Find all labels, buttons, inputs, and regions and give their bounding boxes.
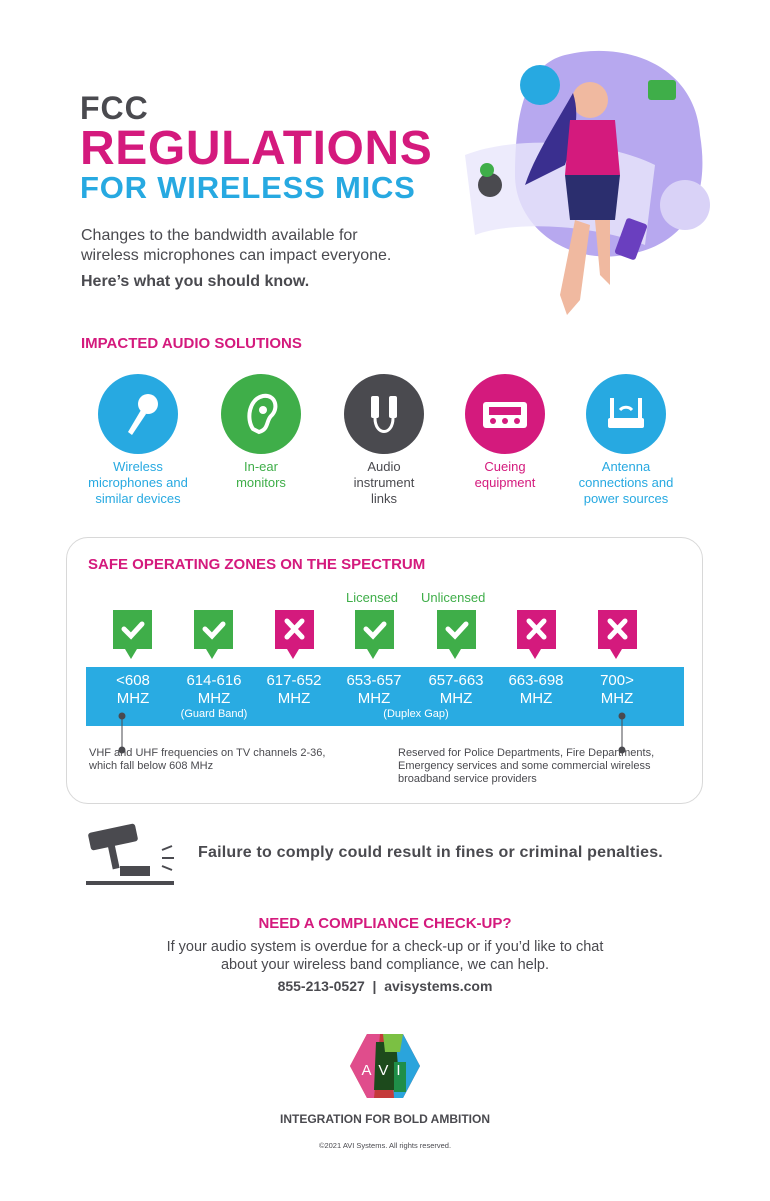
logo: AVI: AVI — [361, 1062, 409, 1079]
copyright: ©2021 AVI Systems. All rights reserved. — [319, 1141, 451, 1150]
tagline: INTEGRATION FOR BOLD AMBITION — [280, 1112, 490, 1126]
title: FOR WIRELESS MICS — [80, 170, 416, 205]
intro text: Here’s what you should know. — [81, 273, 309, 290]
intro text — [81, 227, 391, 290]
spectrum bar: MHZ — [520, 690, 552, 707]
spectrum bar: (Guard Band) — [181, 708, 247, 720]
spectrum bar: 663-698 — [508, 672, 564, 689]
labels licensed/unlicensed: Unlicensed — [421, 590, 485, 605]
icon: gavel — [86, 824, 174, 885]
panel heading: SAFE OPERATING ZONES ON THE SPECTRUM — [88, 556, 425, 573]
spectrum bar: MHZ — [601, 690, 633, 707]
spectrum bar: MHZ — [278, 690, 310, 707]
title: REGULATIONS — [80, 122, 432, 175]
spectrum bar: 653-657 — [346, 672, 402, 689]
heading: impacted audio solutions: IMPACTED AUDIO SOLUTIONS — [81, 335, 302, 352]
spectrum bar: MHZ — [358, 690, 390, 707]
spectrum bar: 614-616 — [186, 672, 242, 689]
call to action: 855-213-0527 | avisystems.com — [278, 978, 492, 994]
logo: AVI — [350, 1034, 420, 1098]
spectrum bar: MHZ — [198, 690, 230, 707]
intro text: Changes to the bandwidth available for wireless microphones can impact everyone. — [81, 227, 391, 264]
spectrum bar — [86, 667, 684, 726]
spectrum bar: (Duplex Gap) — [383, 708, 449, 720]
note: reserved: Reserved for Police Departments, Fire Departments, Emergency services and some commercial wireless broadband service providers — [398, 747, 654, 785]
label: wireless microphones: Wireless microphones and similar devices — [88, 459, 188, 506]
title — [80, 90, 432, 205]
note: VHF/UHF: VHF and UHF frequencies on TV channels 2-36, which fall below 608 MHz — [89, 747, 325, 772]
warning text: Failure to comply could result in fines or criminal penalties. — [198, 844, 663, 861]
icon: antenna — [586, 374, 666, 454]
label: audio instrument links: Audio instrument links — [354, 459, 414, 506]
call to action: NEED A COMPLIANCE CHECK-UP? — [258, 915, 512, 932]
spectrum bar: 700> — [600, 672, 634, 689]
icon: wireless microphone — [98, 374, 178, 454]
spectrum bar: MHZ — [440, 690, 472, 707]
pointer lines — [118, 712, 626, 754]
status bubbles — [113, 610, 637, 659]
label: cueing equipment: Cueing equipment — [475, 459, 535, 490]
spectrum bar: <608 — [116, 672, 150, 689]
labels licensed/unlicensed — [346, 590, 485, 605]
call to action: If your audio system is overdue for a check-up or if you’d like to chat — [167, 939, 603, 955]
icon: in-ear monitors — [221, 374, 301, 454]
icon: cueing equipment — [465, 374, 545, 454]
icon: audio instrument links — [344, 374, 424, 454]
label: in-ear monitors: In-ear monitors — [236, 459, 286, 490]
panel: safe operating zones — [66, 537, 703, 804]
labels licensed/unlicensed: Licensed — [346, 590, 398, 605]
call to action: about your wireless band compliance, we can help. — [221, 957, 549, 973]
title: FCC — [80, 90, 149, 126]
call to action — [167, 915, 604, 994]
spectrum bar: MHZ — [117, 690, 149, 707]
spectrum bar: 657-663 — [428, 672, 484, 689]
illustration: woman with devices — [465, 50, 710, 315]
spectrum bar: 617-652 — [266, 672, 322, 689]
label: antenna connections: Antenna connections and power sources — [579, 459, 673, 506]
